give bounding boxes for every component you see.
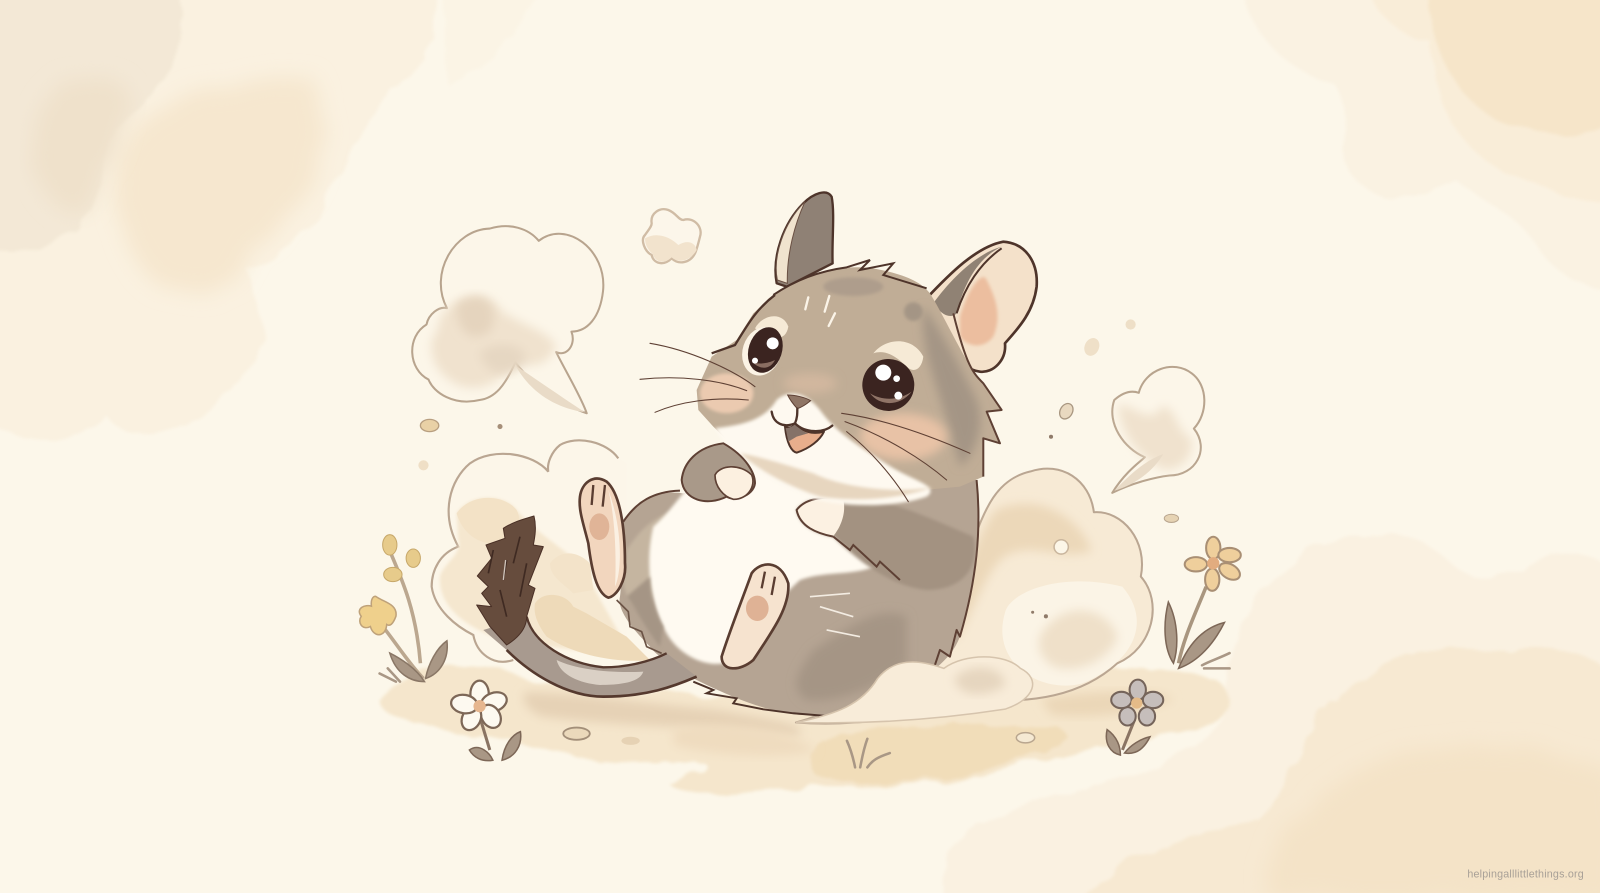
ground patch xyxy=(378,666,1228,794)
watermark: helpingalllittlethings.org xyxy=(1467,869,1584,881)
muzzle and chest xyxy=(715,394,931,505)
head fill xyxy=(697,267,1002,495)
mouse head xyxy=(640,192,1037,505)
left eye xyxy=(736,322,788,381)
mouse xyxy=(477,192,1037,716)
watercolor wash: top right xyxy=(1243,0,1600,294)
dust cloud: right xyxy=(1112,367,1204,493)
dust cloud: back left xyxy=(432,440,650,662)
right eye xyxy=(854,350,923,420)
mouth xyxy=(772,409,832,453)
watercolor wash: top left xyxy=(0,0,541,439)
right ear xyxy=(925,242,1037,372)
dust puff in front of body xyxy=(796,657,1033,723)
purple flower xyxy=(1106,680,1163,755)
yellow flowers left xyxy=(359,535,447,682)
eye patches xyxy=(755,316,788,338)
left paw xyxy=(682,443,755,501)
pebbles and dust specks xyxy=(418,319,1179,745)
peach flower right xyxy=(1165,537,1243,668)
head shading and cheeks xyxy=(700,277,980,467)
dust cloud: large upper left xyxy=(412,226,603,413)
dust cloud: back right xyxy=(796,469,1153,724)
watercolor wash: bottom right xyxy=(944,534,1600,893)
lower foot xyxy=(722,564,788,668)
mouse tail xyxy=(477,516,697,697)
dust cloud: small top xyxy=(643,209,701,263)
right arm xyxy=(797,498,975,590)
left ear xyxy=(775,192,833,287)
grass tufts xyxy=(380,653,1230,767)
raised foot xyxy=(580,479,625,598)
nose xyxy=(788,395,811,409)
head fur marks xyxy=(805,296,835,326)
white flower xyxy=(450,681,521,761)
white belly and chest xyxy=(649,450,880,664)
mouse body xyxy=(477,450,978,716)
whiskers xyxy=(640,343,970,502)
